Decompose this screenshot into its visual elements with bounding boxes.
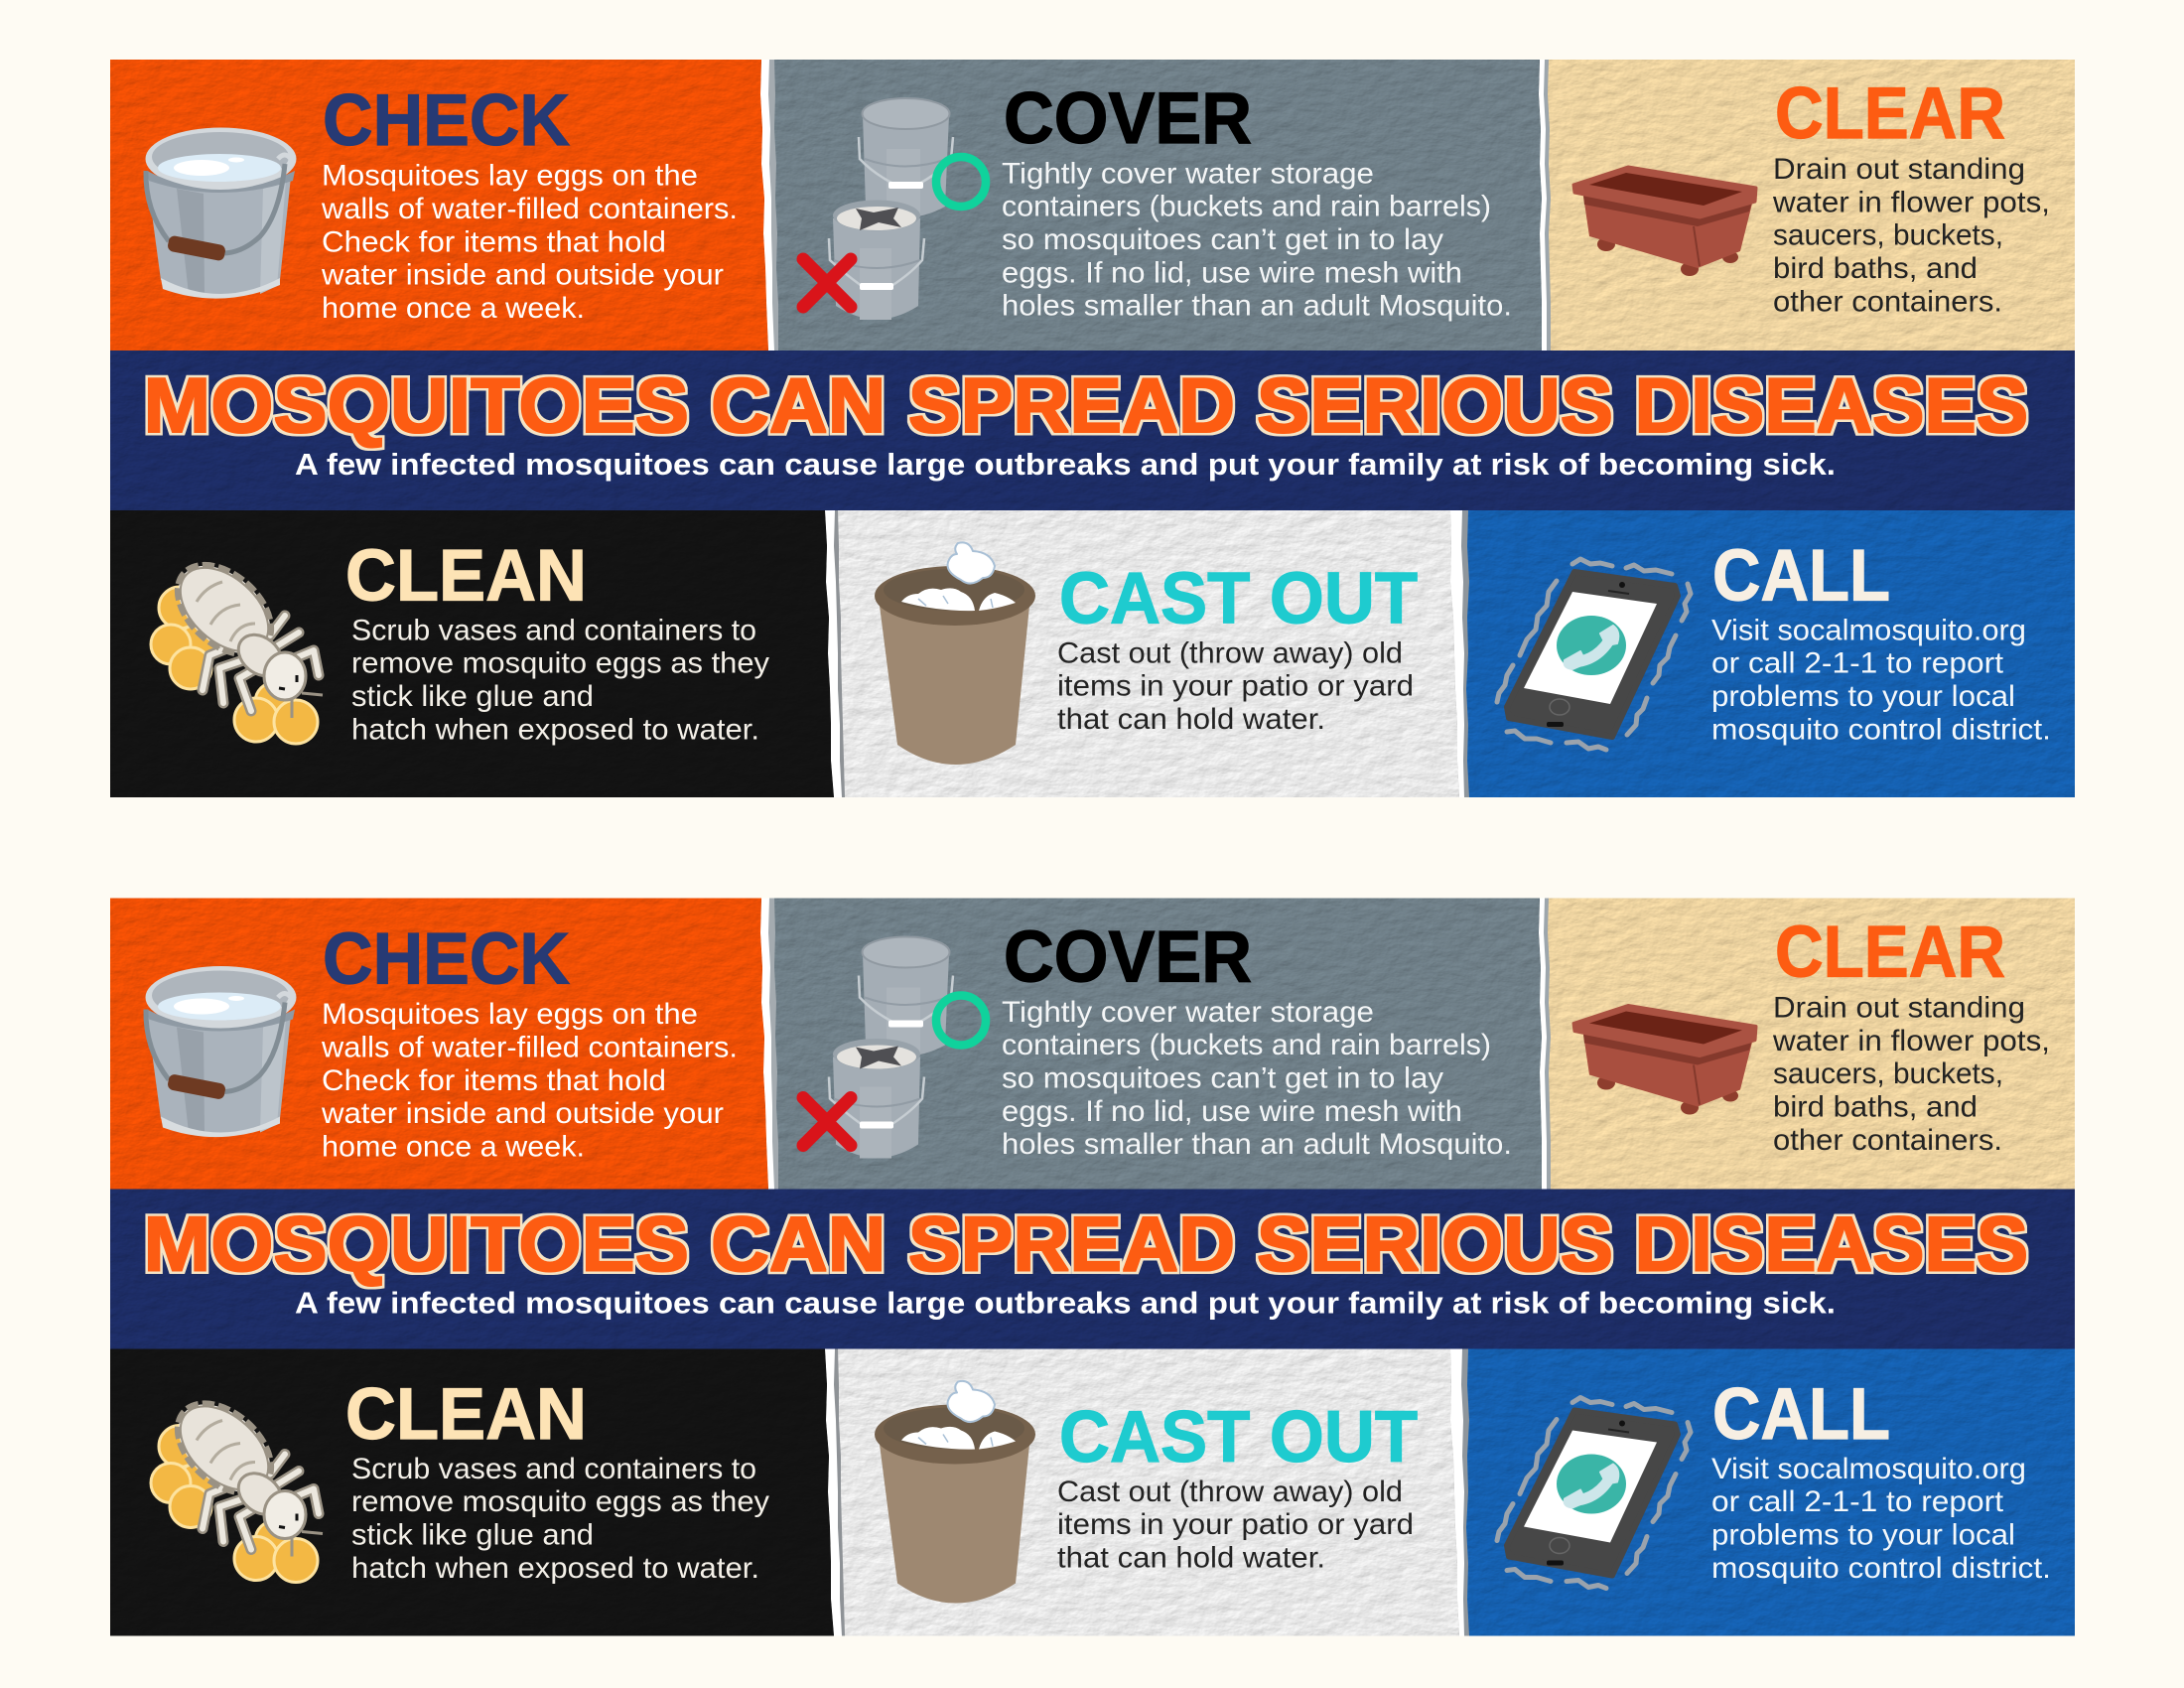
text: clean (351, 1453, 769, 1585)
cover background (759, 60, 1542, 351)
panel: cast out (824, 1348, 1469, 1636)
text: call: Visit socalmosquito.org (1711, 614, 2026, 646)
icon: vibrating phone (1497, 559, 1691, 750)
text: call: mosquito control district. (1711, 713, 2051, 746)
panel: clear (1534, 60, 2075, 351)
text: clear (1772, 991, 2050, 1157)
text: clean: remove mosquito eggs as they (351, 1485, 769, 1518)
band background (110, 351, 2075, 510)
title (143, 1199, 2028, 1287)
text: check: Check for items that hold (322, 225, 666, 258)
title: SPREAD (908, 361, 1235, 449)
cover torn white edge (1529, 60, 1547, 351)
icon: trash can (875, 542, 1035, 765)
text: check: Mosquitoes lay eggs on the (322, 160, 698, 193)
clear background (1534, 898, 2075, 1190)
icon: planter box (1573, 1005, 1756, 1114)
title: SERIOUS (1257, 1199, 1613, 1287)
text: clean: hatch when exposed to water. (351, 1552, 759, 1585)
text: check (321, 160, 738, 325)
banner 2 (110, 898, 2075, 1636)
icon: lidded pail and open pail (803, 937, 986, 1158)
text: call: problems to your local (1711, 1519, 2015, 1551)
call background (1454, 510, 2075, 797)
text: call: mosquito control district. (1711, 1552, 2051, 1585)
text: cover: Tightly cover water storage (1002, 996, 1374, 1029)
text: cover: eggs. If no lid, use wire mesh with (1002, 1095, 1462, 1128)
text: clean (351, 614, 769, 746)
text: clear (1772, 153, 2050, 318)
text: clean: hatch when exposed to water. (351, 713, 759, 746)
panel: cover (759, 898, 1551, 1190)
cast out torn edge (1439, 510, 1469, 797)
check torn white edge (754, 60, 774, 351)
panel: clean (110, 1348, 845, 1636)
panel: call (1454, 510, 2075, 797)
text: clean: stick like glue and (351, 680, 594, 713)
heading: cover: COVER (1004, 917, 1252, 997)
panel: clear (1534, 898, 2075, 1190)
icon: bucket of water (145, 966, 296, 1137)
text: clear: other containers. (1773, 1124, 2002, 1157)
text: clear: saucers, buckets, (1773, 1057, 2003, 1090)
panel: cover (759, 60, 1551, 351)
text: clear: Drain out standing (1773, 153, 2025, 186)
heading: cover: COVER (1004, 78, 1252, 159)
text: cast out: items in your patio or yard (1057, 1508, 1414, 1541)
text: cover: holes smaller than an adult Mosquito. (1002, 1128, 1512, 1161)
heading: call: CALL (1712, 1374, 1890, 1455)
clean background (110, 510, 834, 797)
text: check (321, 998, 738, 1164)
text: cast out: Cast out (throw away) old (1057, 636, 1403, 669)
text: cover (1002, 157, 1512, 323)
cover background (759, 898, 1542, 1190)
text: clear: Drain out standing (1773, 991, 2025, 1025)
cast out torn white edge (1439, 1348, 1464, 1636)
red x (803, 259, 851, 307)
title (143, 361, 2028, 449)
icon: vibrating phone (1497, 1398, 1691, 1589)
icon: trash can (875, 1381, 1035, 1603)
text: call: or call 2-1-1 to report (1711, 647, 2004, 680)
text: check: Check for items that hold (322, 1064, 666, 1097)
text: cover: Tightly cover water storage (1002, 157, 1374, 190)
text: check: walls of water-filled containers. (321, 193, 738, 225)
text: cover: containers (buckets and rain barrels) (1002, 191, 1491, 223)
text: cast out: Cast out (throw away) old (1057, 1476, 1403, 1508)
cover torn edge (1529, 60, 1551, 351)
title: MOSQUITOES (143, 1199, 689, 1287)
icon: mosquito larva with eggs (151, 1387, 323, 1583)
check torn edge (754, 60, 778, 351)
text: clear: bird baths, and (1773, 1090, 1978, 1124)
check background (110, 60, 768, 351)
call background (1454, 1348, 2075, 1636)
clean torn white edge (819, 1348, 842, 1636)
text: call: or call 2-1-1 to report (1711, 1485, 2004, 1518)
text: clean: Scrub vases and containers to (351, 1453, 756, 1485)
text: cast out (1057, 1476, 1414, 1575)
red x (803, 1098, 851, 1146)
text: cover: containers (buckets and rain barrels) (1002, 1029, 1491, 1061)
heading: clear: CLEAR (1775, 912, 2005, 993)
cast out torn edge (1439, 1348, 1469, 1636)
heading: clean: CLEAN (345, 1374, 587, 1455)
text: cover: holes smaller than an adult Mosquito. (1002, 290, 1512, 323)
text: clean: remove mosquito eggs as they (351, 647, 769, 680)
text: clear: bird baths, and (1773, 252, 1978, 285)
text: clear: saucers, buckets, (1773, 219, 2003, 252)
title: MOSQUITOES (143, 361, 689, 449)
cast out background (824, 1348, 1459, 1636)
text: clean: stick like glue and (351, 1519, 594, 1551)
text: clear: water in flower pots, (1772, 1025, 2050, 1057)
heading: check: CHECK (323, 80, 570, 161)
text: cover (1002, 996, 1512, 1161)
panel: check (110, 60, 778, 351)
green circle (936, 995, 986, 1045)
text: clear: water in flower pots, (1772, 186, 2050, 218)
clean background (110, 1348, 834, 1636)
title: SPREAD (908, 1199, 1235, 1287)
text: clear: other containers. (1773, 285, 2002, 318)
icon: lidded pail and open pail (803, 98, 986, 320)
clear background (1534, 60, 2075, 351)
heading: check: CHECK (323, 919, 570, 999)
heading: cast out: CAST OUT (1059, 558, 1418, 638)
check background (110, 898, 768, 1190)
text: cover: so mosquitoes can’t get in to lay (1002, 1062, 1443, 1094)
heading: call: CALL (1712, 535, 1890, 616)
text: call: Visit socalmosquito.org (1711, 1453, 2026, 1485)
check torn white edge (754, 898, 774, 1190)
text: call (1711, 614, 2051, 746)
panel: check (110, 898, 778, 1190)
text: cast out: items in your patio or yard (1057, 670, 1414, 703)
panel: call (1454, 1348, 2075, 1636)
panel: headline band (110, 351, 2075, 510)
text: check: home once a week. (322, 1130, 585, 1164)
text: call (1711, 1453, 2051, 1585)
cover torn edge (1529, 898, 1551, 1190)
icon: mosquito larva with eggs (151, 549, 323, 744)
clean torn edge (819, 510, 845, 797)
banner 1 (110, 60, 2075, 797)
check torn edge (754, 898, 778, 1190)
text: clean: Scrub vases and containers to (351, 614, 756, 646)
heading: cast out: CAST OUT (1059, 1397, 1418, 1477)
panel: headline band (110, 1190, 2075, 1348)
panel: cast out (824, 510, 1469, 797)
title: CAN (711, 1199, 886, 1287)
band background (110, 1190, 2075, 1348)
heading: clear: CLEAR (1775, 73, 2005, 154)
text: check: Mosquitoes lay eggs on the (322, 998, 698, 1031)
title: DISEASES (1634, 1199, 2028, 1287)
text: check: home once a week. (322, 292, 585, 325)
title: CAN (711, 361, 886, 449)
text: check: water inside and outside your (321, 1097, 724, 1130)
cast out torn white edge (1439, 510, 1464, 797)
icon: planter box (1573, 167, 1756, 276)
green circle (936, 157, 986, 207)
cover torn white edge (1529, 898, 1547, 1190)
title: SERIOUS (1257, 361, 1613, 449)
text: call: problems to your local (1711, 680, 2015, 713)
subtitle: A few infected mosquitoes can cause large outbreaks and put your family at risk of becoming sick. (295, 1285, 1836, 1321)
text: check: water inside and outside your (321, 259, 724, 292)
text: cover: so mosquitoes can’t get in to lay (1002, 223, 1443, 256)
text: cover: eggs. If no lid, use wire mesh with (1002, 256, 1462, 289)
clean torn edge (819, 1348, 845, 1636)
cast out background (824, 510, 1459, 797)
icon: bucket of water (145, 127, 296, 299)
heading: clean: CLEAN (345, 535, 587, 616)
text: cast out (1057, 636, 1414, 736)
panel: clean (110, 510, 845, 797)
text: cast out: that can hold water. (1057, 703, 1325, 736)
text: cast out: that can hold water. (1057, 1541, 1325, 1575)
clean torn white edge (819, 510, 842, 797)
title: DISEASES (1634, 361, 2028, 449)
text: check: walls of water-filled containers. (321, 1031, 738, 1064)
subtitle: A few infected mosquitoes can cause large outbreaks and put your family at risk of becoming sick. (295, 447, 1836, 482)
